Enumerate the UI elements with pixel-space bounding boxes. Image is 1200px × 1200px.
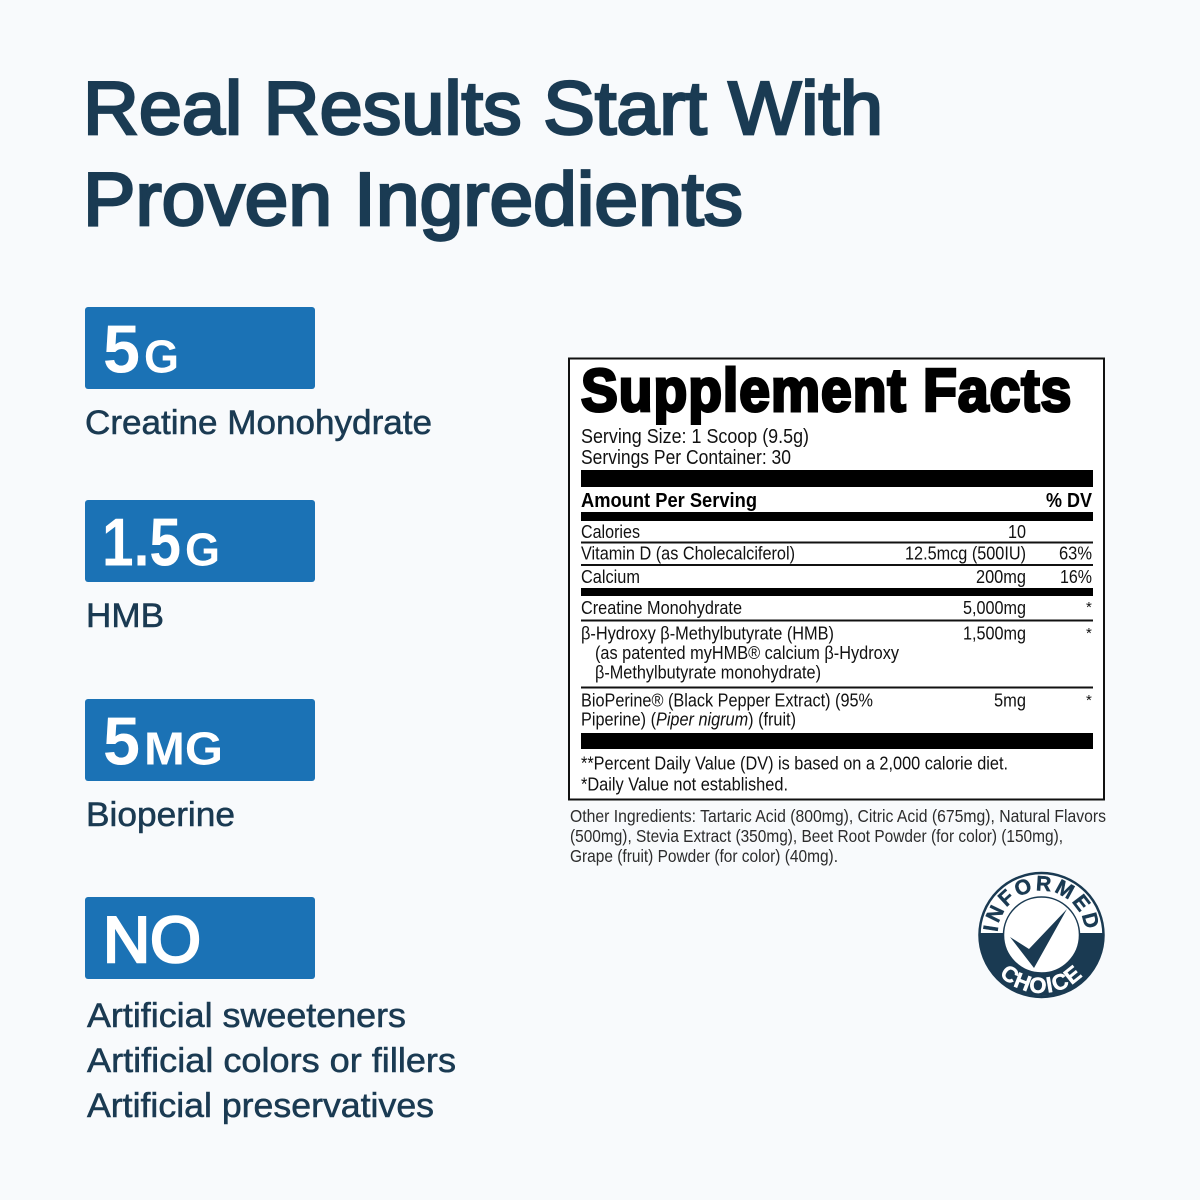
row: vitamin d: Vitamin D (as Cholecalciferol) <box>581 542 795 564</box>
title: Real Results Start With <box>83 66 883 150</box>
label: bioperine: Bioperine <box>86 796 235 834</box>
other ingredients text: (500mg), Stevia Extract (350mg), Beet Root Powder (for color) (150mg), <box>570 826 1063 846</box>
row: calcium: 200mg <box>976 566 1026 587</box>
badge: no: NO <box>103 903 201 976</box>
row: bioperine: BioPerine® (Black Pepper Extract) (95% <box>581 690 873 710</box>
badge: 5g: G <box>144 330 179 382</box>
row: calories: 10 <box>1008 521 1026 542</box>
row: creatine monohydrate: * <box>1086 599 1092 616</box>
list: excluded ingredients: Artificial sweeteners <box>87 997 406 1035</box>
icon: informed choice badge <box>978 872 1105 998</box>
row: bioperine: Piperine) (Piper nigrum) (fruit) <box>581 708 796 730</box>
other ingredients text <box>570 806 1106 866</box>
table header: % DV <box>1046 489 1092 512</box>
row: calcium: 16% <box>1060 566 1092 587</box>
row: hmb <box>581 622 1092 682</box>
row: bioperine <box>581 690 1092 730</box>
row: creatine monohydrate: 5,000mg <box>963 597 1026 618</box>
table header: Amount Per Serving <box>581 489 757 512</box>
table header <box>581 489 1092 512</box>
row: calories <box>581 521 1026 542</box>
row: vitamin d: 63% <box>1059 542 1092 564</box>
badge: 5g: 5 <box>103 312 140 388</box>
row: calories: Calories <box>581 521 640 542</box>
serving information <box>581 425 809 469</box>
other ingredients text: Other Ingredients: Tartaric Acid (800mg), Citric Acid (675mg), Natural Flavors <box>570 806 1106 826</box>
badge: 1.5g: G <box>185 524 220 576</box>
row: creatine monohydrate <box>581 597 1092 618</box>
list: excluded ingredients: Artificial preservatives <box>87 1087 434 1125</box>
row: bioperine: * <box>1086 692 1092 709</box>
title: Proven Ingredients <box>83 157 743 241</box>
panel: supplement facts label <box>569 358 1104 800</box>
panel: key ingredient doses <box>85 307 456 1125</box>
icon: informed choice badge: INFORMED <box>983 876 1098 932</box>
list: excluded ingredients <box>87 997 456 1125</box>
badge: 5mg <box>85 699 315 781</box>
row: hmb: 1,500mg <box>963 622 1026 644</box>
row: hmb: β-Methylbutyrate monohydrate) <box>595 662 821 682</box>
footnotes: *Daily Value not established. <box>581 774 788 794</box>
row: calcium <box>581 566 1092 587</box>
row: hmb: (as patented myHMB® calcium β-Hydroxy <box>595 642 900 663</box>
label: hmb: HMB <box>86 597 164 635</box>
serving information: Serving Size: 1 Scoop (9.5g) <box>581 425 809 448</box>
row: creatine monohydrate: Creatine Monohydrate <box>581 597 742 618</box>
label: creatine monohydrate: Creatine Monohydrate <box>85 404 432 442</box>
badge: no <box>85 897 315 979</box>
list: excluded ingredients: Artificial colors or fillers <box>87 1042 456 1080</box>
row: vitamin d: 12.5mcg (500IU) <box>905 542 1026 564</box>
row: vitamin d <box>581 542 1092 564</box>
row: bioperine: 5mg <box>994 690 1026 710</box>
badge: 1.5g: 1.5 <box>102 504 181 580</box>
badge: 5mg: 5 <box>103 704 140 780</box>
row: hmb: * <box>1086 625 1092 642</box>
row: calcium: Calcium <box>581 566 640 587</box>
row: hmb: β-Hydroxy β-Methylbutyrate (HMB) <box>581 622 834 644</box>
badge: 1.5g <box>85 500 315 582</box>
badge: 5mg: MG <box>144 722 223 774</box>
footnotes <box>581 752 1008 794</box>
badge: 5g <box>85 307 315 389</box>
footnotes: **Percent Daily Value (DV) is based on a 2,000 calorie diet. <box>581 752 1008 774</box>
icon: informed choice badge: CHOICE <box>1002 964 1083 994</box>
other ingredients text: Grape (fruit) Powder (for color) (40mg). <box>570 846 838 866</box>
title <box>83 66 883 241</box>
serving information: Servings Per Container: 30 <box>581 446 791 469</box>
heading: supplement facts: Supplement Facts <box>581 358 1071 425</box>
